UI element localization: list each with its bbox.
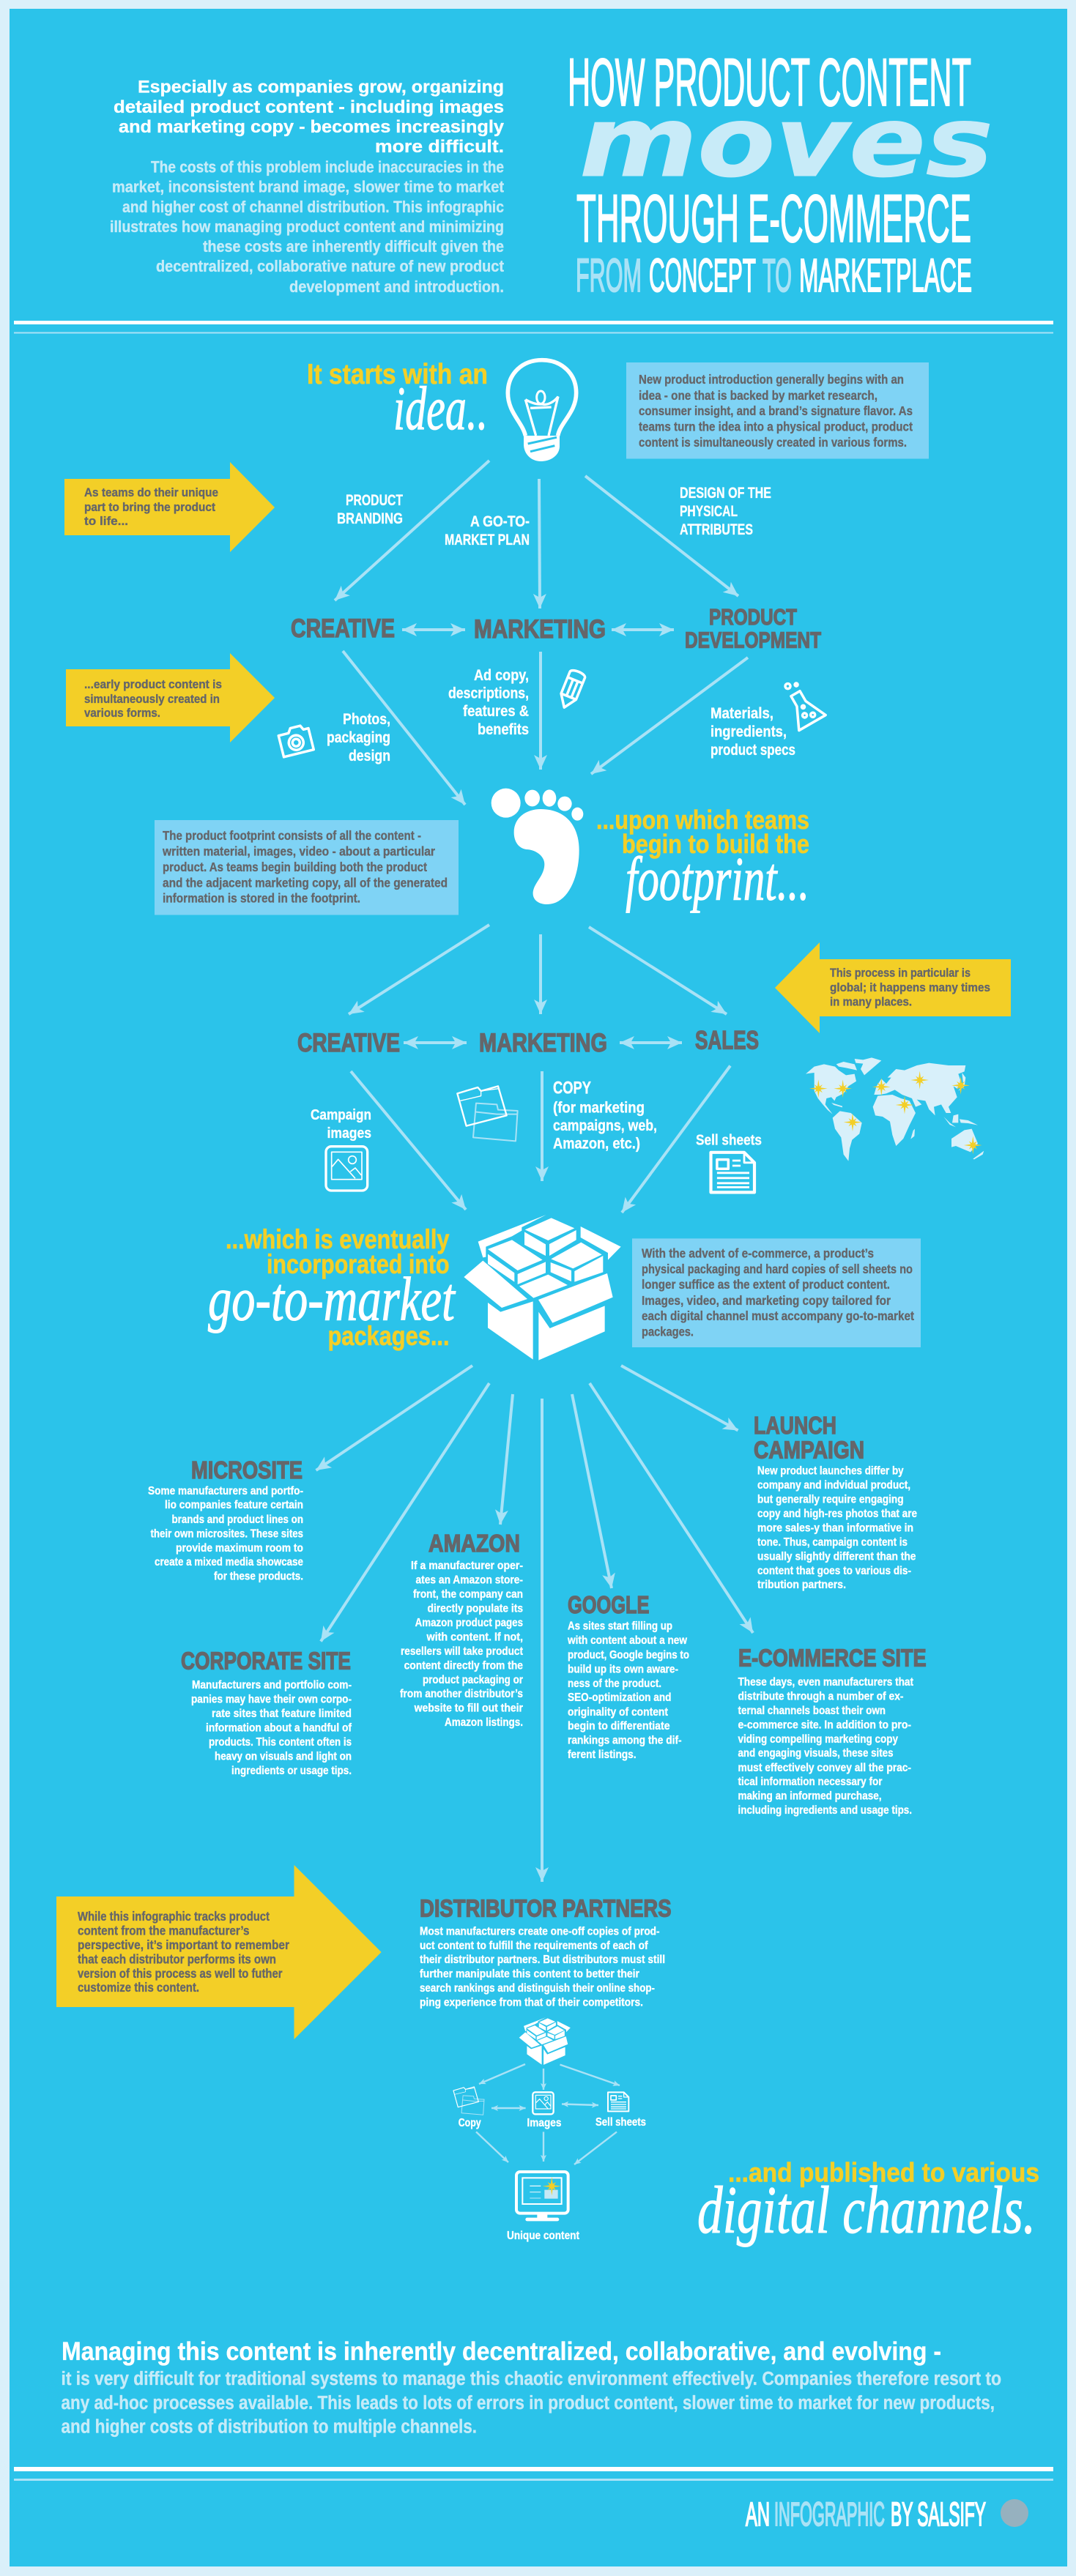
label: unique content: Unique content	[507, 2230, 579, 2242]
channel: distributor partners: DISTRIBUTOR PARTNERS	[420, 1895, 671, 1921]
yellow arrow callout: global process: global; it happens many times	[830, 981, 990, 994]
text: campaign images: images	[327, 1125, 371, 1142]
channel: google	[567, 1591, 689, 1761]
channel: google: begin to differentiate	[568, 1720, 670, 1732]
channel: distributor partners: Most manufacturers create one-off copies of prod-	[420, 1925, 660, 1937]
channel: microsite: lio companies feature certain	[165, 1499, 303, 1511]
channel: e-commerce site: E-COMMERCE SITE	[738, 1645, 927, 1671]
closing statement: and higher costs of distribution to multiple channels.	[62, 2417, 477, 2438]
icon: monitor	[516, 2172, 568, 2221]
channel: microsite: brands and product lines on	[171, 1514, 303, 1526]
yellow arrow callout: distributor perspective: version of this process as well to futher	[78, 1966, 283, 1981]
intro text block: decentralized, collaborative nature of new product	[156, 257, 505, 275]
title	[568, 45, 993, 302]
channel: amazon: resellers will take product	[401, 1645, 523, 1658]
callout: new product introduction	[626, 362, 929, 458]
icon: flask	[776, 675, 825, 731]
channel: amazon: directly populate its	[428, 1603, 523, 1615]
yellow arrow callout: early product content: simultaneously created in	[84, 693, 220, 706]
channel: distributor partners: ping experience from that of their competitors.	[420, 1997, 643, 2009]
callout: advent of e-commerce: packages.	[642, 1324, 694, 1339]
channel: microsite: their own microsites. These sites	[151, 1528, 303, 1541]
channel: corporate site: information about a handful of	[206, 1722, 352, 1734]
icon: sell sheet document large	[710, 1153, 754, 1192]
heading: go-to-market packages	[208, 1224, 456, 1351]
labels: copy, images, sell sheets: Images	[527, 2117, 561, 2129]
channel: amazon: product packaging or	[423, 1674, 523, 1686]
yellow arrow callout: teams do their part: part to bring the product	[84, 501, 215, 514]
labels: copy, images, sell sheets	[459, 2116, 646, 2129]
channel: launch campaign: usually slightly different than the	[757, 1551, 916, 1563]
title: CONCEPT	[649, 249, 756, 302]
yellow arrow callout: teams do their part: to life...	[84, 515, 128, 528]
text: campaign images: Campaign	[311, 1107, 371, 1123]
world map	[806, 1057, 984, 1161]
arrows from teams to footprint	[343, 651, 748, 805]
labels: copy, images, sell sheets: Sell sheets	[595, 2116, 646, 2129]
icon: image frame	[326, 1147, 368, 1191]
heading: upon which teams begin to build the footprint: begin to build the	[622, 829, 809, 859]
team headings row two	[297, 1027, 759, 1057]
channel: amazon: from another distributor’s	[400, 1688, 523, 1700]
heading: upon which teams begin to build the footprint: ...upon which teams	[596, 805, 809, 835]
callout: new product introduction: content is simultaneously created in various forms.	[639, 435, 907, 450]
callout: advent of e-commerce: each digital channel must accompany go-to-market	[642, 1309, 914, 1323]
distributor flow arrows	[476, 2064, 620, 2164]
channel: corporate site: products. This content often is	[209, 1736, 352, 1749]
labels on first arrows: PHYSICAL	[680, 503, 738, 520]
channel: distributor partners	[420, 1895, 671, 2009]
labels on first arrows: BRANDING	[337, 510, 403, 527]
callout: new product introduction: New product introduction generally begins with an	[639, 372, 904, 387]
channel: launch campaign: LAUNCH	[754, 1412, 836, 1439]
channel: microsite: MICROSITE	[191, 1456, 303, 1484]
title: TO	[763, 249, 792, 302]
channel: microsite: provide maximum room to	[176, 1542, 303, 1555]
callout: advent of e-commerce: With the advent of e-commerce, a product’s	[642, 1246, 874, 1261]
text: materials: product specs	[710, 742, 795, 759]
callout: advent of e-commerce: longer suffice as the extent of product content.	[642, 1277, 890, 1292]
callout: product footprint: information is stored in the footprint.	[163, 891, 360, 906]
labels on first arrows: PRODUCT	[346, 492, 403, 509]
channel: amazon: ates an Amazon store-	[416, 1574, 523, 1586]
channel: e-commerce site: These days, even manufacturers that	[738, 1676, 913, 1689]
intro text block: detailed product content - including images	[114, 97, 504, 117]
channel: e-commerce site: tical information necessary for	[738, 1776, 882, 1788]
icon: small image	[533, 2092, 554, 2114]
channel: distributor partners: their distributor partners. But distributors must still	[420, 1954, 665, 1966]
heading: it starts with an idea	[307, 359, 488, 443]
labels on first arrows	[337, 485, 771, 548]
callout: advent of e-commerce: physical packaging and hard copies of sell sheets no	[642, 1262, 913, 1276]
credit: an infographic by salsify: BY SALSIFY	[891, 2495, 986, 2533]
text: photos: packaging	[327, 729, 390, 746]
heading: published to digital channels: ...and published to various	[728, 2158, 1039, 2188]
channel: e-commerce site: ternal channels boast their own	[738, 1705, 886, 1717]
channel: microsite: create a mixed media showcase	[155, 1556, 303, 1568]
channel: corporate site: Manufacturers and portfolio com-	[192, 1679, 352, 1691]
closing statement	[62, 2337, 1001, 2438]
channel: corporate site: rate sites that feature limited	[212, 1708, 352, 1720]
heading: it starts with an idea: idea..	[393, 374, 488, 443]
labels: copy, images, sell sheets: Copy	[459, 2117, 481, 2129]
channel: launch campaign	[754, 1412, 917, 1591]
labels on first arrows: DESIGN OF THE	[680, 485, 771, 502]
logo: salsify mark	[1001, 2499, 1028, 2527]
callout: product footprint: and the adjacent marketing copy, all of the generated	[163, 875, 448, 890]
text: copy: (for marketing	[553, 1100, 645, 1117]
icon: open box	[464, 1215, 621, 1360]
intro text block: these costs are inherently difficult given the	[203, 237, 504, 256]
yellow arrow callout: distributor perspective: content from the manufacturer’s	[78, 1923, 250, 1937]
channel: amazon: If a manufacturer oper-	[411, 1560, 523, 1572]
icon: small sell sheet	[608, 2092, 628, 2111]
channel: launch campaign: content that goes to various dis-	[757, 1565, 911, 1577]
text: materials: Materials,	[710, 705, 773, 722]
yellow arrow callout: global process: This process in particular is	[830, 967, 971, 980]
channel: corporate site: CORPORATE SITE	[181, 1648, 351, 1675]
intro text block: market, inconsistent brand image, slower time to market	[112, 177, 505, 196]
channel: microsite: for these products.	[214, 1570, 303, 1583]
channel: distributor partners: further manipulate this content to better their	[420, 1968, 639, 1980]
yellow arrow callout: early product content	[66, 653, 275, 742]
arrows from teams to package	[351, 1066, 730, 1213]
channel: google: GOOGLE	[568, 1591, 649, 1618]
labels on first arrows: MARKET PLAN	[445, 532, 530, 548]
yellow arrow callout: distributor perspective: While this infographic tracks product	[78, 1909, 270, 1924]
yellow arrow callout: distributor perspective: that each distributor performs its own	[78, 1952, 276, 1967]
channel: launch campaign: CAMPAIGN	[754, 1436, 864, 1463]
text: ad copy: Ad copy,	[474, 667, 529, 684]
team headings row one	[291, 604, 821, 653]
channel: corporate site: heavy on visuals and light on	[215, 1751, 352, 1763]
channel: google: product, Google begins to	[568, 1649, 689, 1661]
text: photos: design	[349, 748, 390, 764]
channel: amazon: Amazon listings.	[445, 1716, 523, 1729]
channel: e-commerce site: and engaging visuals, these sites	[738, 1747, 894, 1760]
heading: it starts with an idea: It starts with an	[307, 359, 488, 390]
icon: pencil	[557, 669, 586, 710]
heading: upon which teams begin to build the footprint	[596, 805, 809, 914]
channel: microsite: Some manufacturers and portfo-	[148, 1485, 303, 1497]
icon: folders	[457, 1086, 518, 1141]
text: sell sheets: Sell sheets	[696, 1133, 762, 1149]
channel: google: As sites start filling up	[568, 1620, 672, 1633]
title: moves	[579, 86, 993, 199]
arrows from footprint to teams	[349, 925, 727, 1014]
intro text block: and marketing copy - becomes increasingly	[119, 117, 504, 137]
closing statement: Managing this content is inherently decentralized, collaborative, and evolving -	[62, 2337, 941, 2366]
text: ad copy	[448, 667, 529, 738]
yellow arrow callout: global process: in many places.	[830, 996, 912, 1009]
channel: launch campaign: copy and high-res photos that are	[757, 1508, 917, 1520]
text: copy	[553, 1078, 657, 1153]
channel: corporate site	[181, 1648, 352, 1777]
channel: google: ness of the product.	[568, 1678, 661, 1690]
heading: go-to-market packages: go-to-market	[208, 1265, 456, 1334]
yellow arrow callout: teams do their part: As teams do their unique	[84, 486, 218, 499]
credit: an infographic by salsify: AN	[746, 2495, 770, 2533]
title: FROM	[576, 249, 642, 302]
heading: upon which teams begin to build the footprint: footprint...	[626, 845, 809, 914]
channel: e-commerce site: e-commerce site. In addition to pro-	[738, 1719, 911, 1731]
yellow arrow callout: distributor perspective: perspective, it’s important to remember	[78, 1937, 289, 1952]
icon: light bulb	[508, 360, 576, 461]
channel: amazon: Amazon product pages	[415, 1617, 523, 1629]
arrows from package to channels	[316, 1366, 753, 1882]
channel: microsite	[148, 1456, 303, 1583]
intro text block: and higher cost of channel distribution. This infographic	[122, 198, 504, 216]
callout: new product introduction: idea - one that is backed by market research,	[639, 388, 878, 403]
yellow arrow callout: teams do their part	[64, 462, 275, 552]
callout: product footprint: product. As teams begin building both the product	[163, 860, 427, 874]
yellow arrow callout: distributor perspective: customize this content.	[78, 1980, 199, 1995]
channel: e-commerce site: must effectively convey all the prac-	[738, 1762, 911, 1774]
text: materials: ingredients,	[710, 723, 787, 740]
channel: distributor partners: uct content to fulfill the requirements of each of	[420, 1940, 648, 1952]
team headings row two: SALES	[695, 1027, 759, 1055]
text: ad copy: features &	[463, 703, 529, 720]
callout: advent of e-commerce	[632, 1238, 921, 1347]
channel: e-commerce site: making an informed purchase,	[738, 1790, 882, 1803]
team headings row two: MARKETING	[479, 1029, 607, 1057]
heading: go-to-market packages: incorporated into	[267, 1249, 450, 1279]
callout: new product introduction: consumer insight, and a brand’s signature flavor. As	[639, 403, 913, 418]
channel: launch campaign: tone. Thus, campaign content is	[757, 1536, 908, 1549]
icon: footprint	[491, 789, 583, 904]
channel: e-commerce site	[738, 1645, 927, 1817]
text: copy: COPY	[553, 1078, 591, 1098]
intro text block: development and introduction.	[289, 278, 504, 296]
intro text block: The costs of this problem include inaccuracies in the	[151, 158, 504, 176]
channel: google: build up its own aware-	[568, 1664, 678, 1675]
channel: google: ferent listings.	[568, 1749, 637, 1761]
channel: amazon: AMAZON	[428, 1530, 520, 1557]
intro text block	[110, 78, 505, 296]
channel: google: originality of content	[568, 1706, 668, 1719]
yellow arrow callout: distributor perspective	[56, 1865, 382, 2039]
team headings row one: DEVELOPMENT	[685, 627, 821, 653]
text: materials	[710, 705, 795, 759]
double arrows row one	[402, 628, 674, 631]
callout: advent of e-commerce: Images, video, and marketing copy tailored for	[642, 1293, 891, 1308]
channel: e-commerce site: viding compelling marketing copy	[738, 1733, 898, 1746]
channel: distributor partners: search rankings and distinguish their online shop-	[420, 1982, 655, 1995]
channel: google: SEO-optimization and	[568, 1691, 671, 1704]
double arrows row two	[404, 1041, 682, 1044]
channel: e-commerce site: distribute through a number of ex-	[738, 1691, 904, 1703]
channel: corporate site: panies may have their own corpo-	[191, 1694, 352, 1706]
callout: product footprint: written material, images, video - about a particular	[162, 844, 435, 859]
channel: google: rankings among the dif-	[568, 1735, 682, 1747]
labels on first arrows: ATTRIBUTES	[680, 521, 753, 538]
team headings row two: CREATIVE	[297, 1029, 400, 1057]
callout: product footprint	[155, 820, 459, 915]
channel: amazon: front, the company can	[413, 1588, 523, 1601]
text: photos	[327, 711, 390, 764]
channel: e-commerce site: including ingredients and usage tips.	[738, 1804, 912, 1817]
yellow arrow callout: early product content: various forms.	[84, 707, 160, 720]
channel: launch campaign: company and indvidual product,	[757, 1479, 910, 1492]
team headings row one: CREATIVE	[291, 614, 395, 643]
channel: amazon	[400, 1530, 523, 1729]
text: copy: campaigns, web,	[553, 1117, 657, 1134]
team headings row one: MARKETING	[474, 615, 606, 644]
intro text block: illustrates how managing product content and minimizing	[110, 217, 504, 236]
channel: amazon: website to fill out their	[414, 1702, 523, 1715]
text: ad copy: benefits	[478, 721, 529, 738]
icon: small folders	[453, 2087, 484, 2115]
labels on first arrows: A GO-TO-	[470, 513, 530, 530]
text: ad copy: descriptions,	[448, 685, 529, 701]
heading: go-to-market packages: packages...	[328, 1321, 450, 1351]
text: copy: Amazon, etc.)	[553, 1136, 640, 1153]
channel: launch campaign: New product launches differ by	[757, 1464, 904, 1478]
arrows from idea to teams	[335, 461, 738, 608]
credit: an infographic by salsify: INFOGRAPHIC	[774, 2495, 885, 2533]
channel: launch campaign: more sales-y than informative in	[757, 1522, 913, 1534]
callout: new product introduction: teams turn the idea into a physical product, product	[639, 419, 913, 433]
channel: corporate site: ingredients or usage tips.	[231, 1765, 352, 1777]
channel: launch campaign: tribution partners.	[757, 1579, 846, 1591]
yellow arrow callout: early product content: ...early product content is	[84, 678, 222, 691]
yellow arrow callout: global process	[775, 942, 1011, 1033]
callout: product footprint: The product footprint consists of all the content -	[163, 828, 421, 843]
text: campaign images	[311, 1107, 371, 1142]
channel: google: with content about a new	[567, 1634, 688, 1647]
team headings row one: PRODUCT	[709, 604, 797, 630]
channel: amazon: with content. If not,	[426, 1631, 523, 1643]
heading: go-to-market packages: ...which is eventually	[226, 1224, 450, 1254]
icon: camera	[278, 724, 313, 757]
channel: amazon: content directly from the	[404, 1660, 523, 1672]
channel: launch campaign: but generally require engaging	[757, 1494, 904, 1506]
intro text block: Especially as companies grow, organizing	[138, 78, 504, 97]
intro text block: more difficult.	[375, 137, 504, 157]
text: photos: Photos,	[343, 711, 390, 728]
icon: small box	[519, 2017, 571, 2065]
